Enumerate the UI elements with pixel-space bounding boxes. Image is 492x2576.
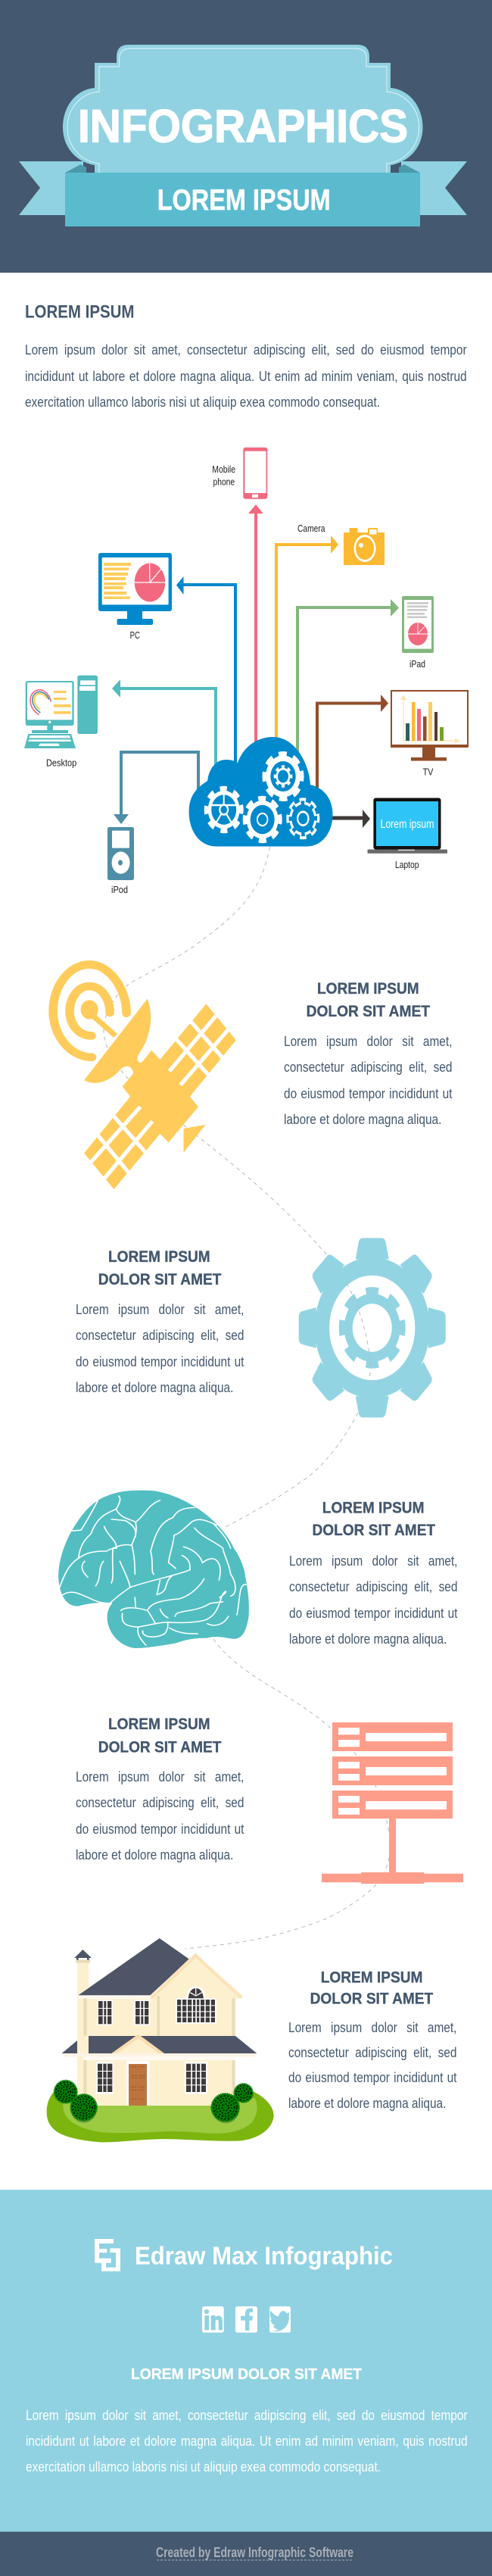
main roof	[78, 1938, 189, 1995]
heading: gear: LOREM IPSUM	[108, 1248, 210, 1266]
text: brain: do eiusmod tempor incididunt ut	[289, 1606, 457, 1621]
label: mobile phone	[212, 464, 235, 488]
icon: camera	[344, 528, 385, 565]
icon: brain	[58, 1491, 249, 1648]
lower roof	[62, 2041, 77, 2053]
social icons	[202, 2306, 291, 2333]
icon: gear middle	[245, 798, 280, 841]
icon: ipad	[402, 596, 434, 653]
heading: server: DOLOR SIT AMET	[98, 1739, 222, 1756]
heading: house: LOREM IPSUM	[321, 1969, 422, 1987]
arched window	[176, 1986, 216, 2024]
icon: server	[322, 1722, 463, 1884]
header banner	[0, 0, 492, 273]
icon: laptop: Lorem ipsum	[380, 818, 434, 831]
icon: gear right	[288, 800, 318, 837]
ribbon folds	[65, 164, 420, 173]
label: ipod: iPod	[111, 884, 128, 895]
footer panel	[0, 2190, 492, 2532]
text: satellite: consectetur adipiscing elit, sed	[283, 1060, 452, 1075]
icon: tv	[391, 691, 469, 760]
label: pc: PC	[130, 629, 140, 641]
chimney	[74, 1950, 92, 2097]
text: brain: Lorem ipsum dolor sit amet,	[289, 1553, 457, 1569]
arrow: laptop	[332, 810, 370, 828]
footer paragraph: incididunt ut labore et dolore magna aliqua. Ut enim ad minim veniam, quis nostrud	[26, 2434, 468, 2449]
pillars	[83, 1996, 235, 2098]
heading: satellite: DOLOR SIT AMET	[307, 1003, 430, 1020]
text: house: labore et dolore magna aliqua.	[288, 2096, 446, 2111]
icon: gear left	[207, 788, 241, 831]
intro paragraph: incididunt ut labore et dolore magna aliqua. Ut enim ad minim veniam, quis nostrud	[25, 368, 467, 383]
porch gable	[114, 2036, 164, 2053]
text: satellite: Lorem ipsum dolor sit amet,	[283, 1034, 452, 1049]
credit bar	[0, 2531, 492, 2576]
text: satellite: labore et dolore magna aliqua.	[283, 1112, 441, 1127]
arrow: camera	[276, 535, 338, 738]
footer heading: LOREM IPSUM DOLOR SIT AMET	[131, 2366, 362, 2383]
heading: server	[98, 1716, 222, 1756]
icon: house	[47, 1938, 274, 2142]
text: house: consectetur adipiscing elit, sed	[288, 2045, 456, 2060]
icon: ipod	[107, 827, 134, 880]
title: INFOGRAPHICS	[78, 100, 408, 151]
text: gear: labore et dolore magna aliqua.	[76, 1380, 233, 1395]
arrow: ipod	[114, 752, 198, 824]
label: camera: Camera	[297, 523, 325, 534]
icon: mobile phone	[243, 448, 267, 499]
cloud device diagram	[24, 448, 469, 895]
text: house: do eiusmod tempor incididunt ut	[288, 2070, 456, 2085]
arrow: desktop	[112, 679, 216, 767]
icon: laptop	[368, 798, 447, 854]
heading: house: DOLOR SIT AMET	[310, 1991, 433, 2008]
text: server	[76, 1769, 244, 1863]
heading: brain	[312, 1499, 435, 1539]
ribbon tails	[19, 161, 467, 215]
heading: satellite: LOREM IPSUM	[317, 980, 419, 998]
text: brain	[289, 1553, 457, 1647]
heading: brain: DOLOR SIT AMET	[312, 1522, 435, 1539]
text: satellite: do eiusmod tempor incididunt ut	[283, 1086, 452, 1101]
text: brain: consectetur adipiscing elit, sed	[289, 1579, 457, 1594]
text: satellite	[283, 1034, 453, 1127]
icon: pc	[98, 553, 172, 625]
text: server: labore et dolore magna aliqua.	[76, 1847, 233, 1863]
footer paragraph: exercitation ullamco laboris nisi ut aliquip exea commodo consequat.	[26, 2459, 381, 2475]
eaves	[61, 2053, 257, 2057]
arrow: pc	[176, 576, 235, 763]
ribbon	[65, 173, 420, 226]
heading: satellite	[307, 980, 430, 1020]
icon: facebook	[235, 2306, 257, 2333]
text: gear	[76, 1302, 244, 1395]
gable trim	[151, 1956, 241, 1997]
credit text: Created by Edraw Infographic Software	[156, 2545, 353, 2560]
upper windows	[97, 2000, 150, 2025]
icon: twitter	[269, 2306, 291, 2333]
icon: desktop	[24, 676, 98, 748]
label: laptop: Laptop	[395, 859, 419, 870]
heading: server: LOREM IPSUM	[108, 1716, 210, 1733]
heading: house	[310, 1969, 433, 2008]
icon: gear top	[265, 754, 301, 798]
text: house	[288, 2020, 457, 2111]
badge	[63, 45, 422, 178]
upper walls	[77, 1958, 242, 2036]
icon: edraw logo	[95, 2239, 120, 2272]
intro paragraph: Lorem ipsum dolor sit amet, consectetur adipiscing elit, sed do eiusmod tempor	[25, 342, 467, 358]
text: server: do eiusmod tempor incididunt ut	[76, 1822, 244, 1837]
icon: cloud	[189, 737, 333, 847]
intro heading: LOREM IPSUM	[25, 302, 135, 323]
label: mobile phone: Mobile	[212, 464, 235, 475]
footer title: Edraw Max Infographic	[135, 2242, 393, 2270]
intro paragraph	[25, 342, 467, 410]
arrow: mobile phone	[248, 504, 263, 743]
heading: brain: LOREM IPSUM	[322, 1499, 424, 1516]
dashed connector path	[104, 847, 390, 1949]
icon: linkedin	[202, 2306, 224, 2333]
connector inside gear hole	[347, 1284, 370, 1380]
footer paragraph: Lorem ipsum dolor sit amet, consectetur adipiscing elit, sed do eiusmod tempor	[26, 2408, 468, 2423]
label: desktop: Desktop	[46, 757, 76, 769]
arrow: ipad	[297, 599, 399, 754]
text: server: consectetur adipiscing elit, sed	[76, 1795, 244, 1810]
text: brain: labore et dolore magna aliqua.	[289, 1631, 447, 1647]
door	[126, 2061, 149, 2106]
text: server: Lorem ipsum dolor sit amet,	[76, 1769, 244, 1784]
icon: satellite	[53, 964, 236, 1189]
text: house: Lorem ipsum dolor sit amet,	[288, 2020, 456, 2035]
heading: gear: DOLOR SIT AMET	[98, 1271, 222, 1288]
footer paragraph	[26, 2408, 468, 2475]
label: ipad: iPad	[409, 658, 425, 670]
text: gear: Lorem ipsum dolor sit amet,	[76, 1302, 244, 1317]
heading: gear	[98, 1248, 222, 1288]
lawn	[47, 2088, 274, 2142]
lower windows	[96, 2062, 207, 2094]
ribbon subtitle: LOREM IPSUM	[157, 184, 331, 217]
label: tv: TV	[422, 767, 434, 777]
text: gear: do eiusmod tempor incididunt ut	[76, 1354, 244, 1369]
intro paragraph: exercitation ullamco laboris nisi ut aliquip exea commodo consequat.	[25, 395, 380, 410]
label: mobile phone: phone	[213, 476, 235, 488]
bushes	[54, 2081, 253, 2123]
text: gear: consectetur adipiscing elit, sed	[76, 1328, 244, 1343]
arrow: tv	[317, 695, 388, 789]
icon: gear	[299, 1238, 446, 1418]
lower wall	[87, 2060, 232, 2106]
